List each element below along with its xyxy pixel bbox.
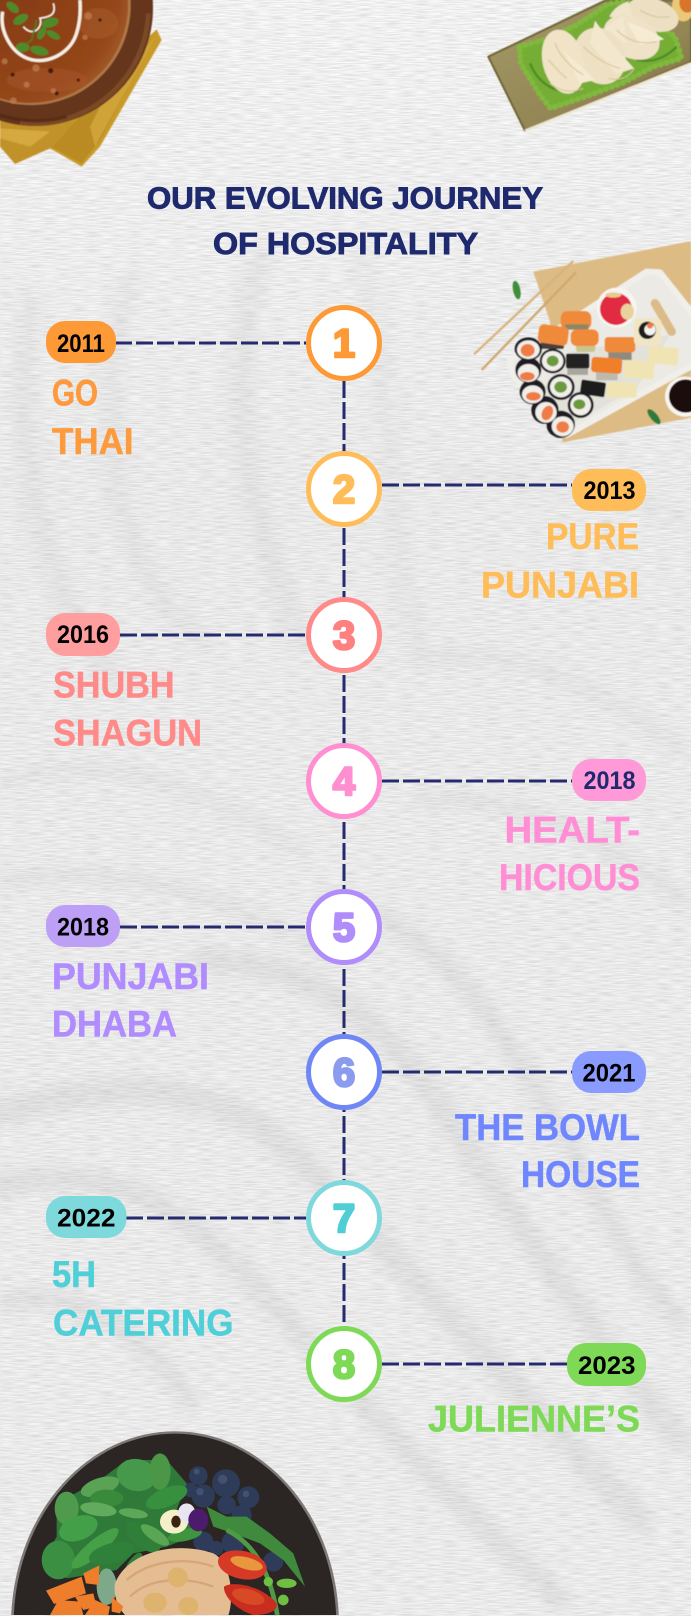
number node 6	[308, 1036, 380, 1108]
number node 2: 2	[333, 468, 355, 512]
number node 5	[308, 892, 380, 962]
connector	[115, 342, 306, 344]
name: Go Thai: THAI	[52, 421, 134, 462]
year badge 2013	[572, 469, 646, 511]
year badge 2016: 2016	[57, 621, 109, 649]
year badge 2018: 2018	[57, 914, 109, 942]
step 3: Shubh Shagun, 2016	[46, 600, 380, 754]
number node 8: 8	[333, 1343, 355, 1387]
number node 7: 7	[333, 1197, 355, 1241]
name: Punjabi Dhaba	[52, 956, 209, 1044]
year badge 2013: 2013	[584, 477, 636, 505]
year badge 2023: 2023	[578, 1352, 636, 1380]
step 2: Pure Punjabi, 2013	[308, 454, 646, 606]
name: Pure Punjabi	[481, 516, 639, 606]
number node 3: 3	[333, 614, 355, 658]
number node 1: 1	[333, 322, 355, 366]
name: Healt-hicious	[499, 810, 640, 898]
number node 4: 4	[333, 760, 356, 804]
year badge 2021	[572, 1051, 646, 1093]
connector	[382, 484, 572, 486]
food photo: salad bowl	[11, 1431, 339, 1615]
name: 5H Catering: CATERING	[53, 1302, 234, 1344]
name: Pure Punjabi: PUNJABI	[481, 564, 639, 606]
step 7: 5H Catering, 2022	[46, 1182, 380, 1344]
number node 7	[308, 1182, 380, 1254]
year badge 2022	[46, 1196, 126, 1238]
number node 6: 6	[333, 1051, 355, 1095]
step 1: Go Thai, 2011	[46, 308, 380, 462]
name: Punjabi Dhaba: DHABA	[52, 1004, 177, 1044]
name: Go Thai: GO	[52, 372, 98, 414]
connector	[382, 1070, 572, 1074]
name: Shubh Shagun	[53, 664, 202, 754]
step 4: Healt-hicious, 2018	[308, 746, 646, 898]
name: The Bowl House: HOUSE	[521, 1154, 640, 1195]
number node 8	[308, 1328, 380, 1400]
year badge 2018	[46, 905, 120, 947]
year badge 2011	[46, 321, 116, 363]
name: 5H Catering: 5H	[52, 1254, 96, 1295]
year badge 2021: 2021	[582, 1060, 636, 1088]
connector	[382, 780, 572, 782]
name: The Bowl House	[455, 1107, 640, 1195]
title: OUR EVOLVING JOURNEY	[147, 180, 543, 216]
name: Healt-hicious: HEALT-	[504, 810, 640, 850]
name: Go Thai	[52, 372, 134, 462]
year badge 2022: 2022	[57, 1204, 116, 1232]
step 8: Julienne's, 2023	[308, 1328, 646, 1440]
number node 4	[308, 746, 380, 816]
name: Julienne's: JULIENNE’S	[428, 1398, 640, 1440]
name: Punjabi Dhaba: PUNJABI	[52, 956, 209, 997]
food photo: momos on tray	[488, 0, 691, 131]
connector	[382, 1362, 568, 1366]
year badge 2018	[572, 759, 646, 801]
number node 5: 5	[333, 906, 355, 950]
year badge 2011: 2011	[57, 330, 105, 358]
bowl body	[11, 1431, 339, 1615]
name: Healt-hicious: HICIOUS	[499, 857, 640, 898]
vertical dashed timeline spine	[342, 381, 346, 1326]
connector	[126, 1216, 306, 1220]
name: Pure Punjabi: PURE	[546, 516, 639, 557]
year badge 2016	[46, 613, 120, 656]
step 5: Punjabi Dhaba, 2018	[46, 892, 380, 1044]
step 6: The Bowl House, 2021	[308, 1036, 646, 1195]
connector	[120, 634, 306, 636]
number node 3	[308, 600, 380, 670]
name: The Bowl House: THE BOWL	[455, 1107, 640, 1148]
number node 2	[308, 454, 380, 524]
name: 5H Catering	[52, 1254, 234, 1344]
title	[147, 180, 543, 261]
food photo: dal in wooden bowl	[0, 0, 162, 167]
year badge 2018: 2018	[584, 767, 636, 795]
number node 1	[308, 308, 380, 378]
title: OF HOSPITALITY	[213, 226, 478, 261]
name: Shubh Shagun: SHUBH	[53, 664, 174, 706]
name: Shubh Shagun: SHAGUN	[53, 712, 202, 754]
food photo: sushi platter	[474, 242, 691, 442]
year badge 2023	[567, 1343, 646, 1386]
connector	[120, 926, 306, 928]
